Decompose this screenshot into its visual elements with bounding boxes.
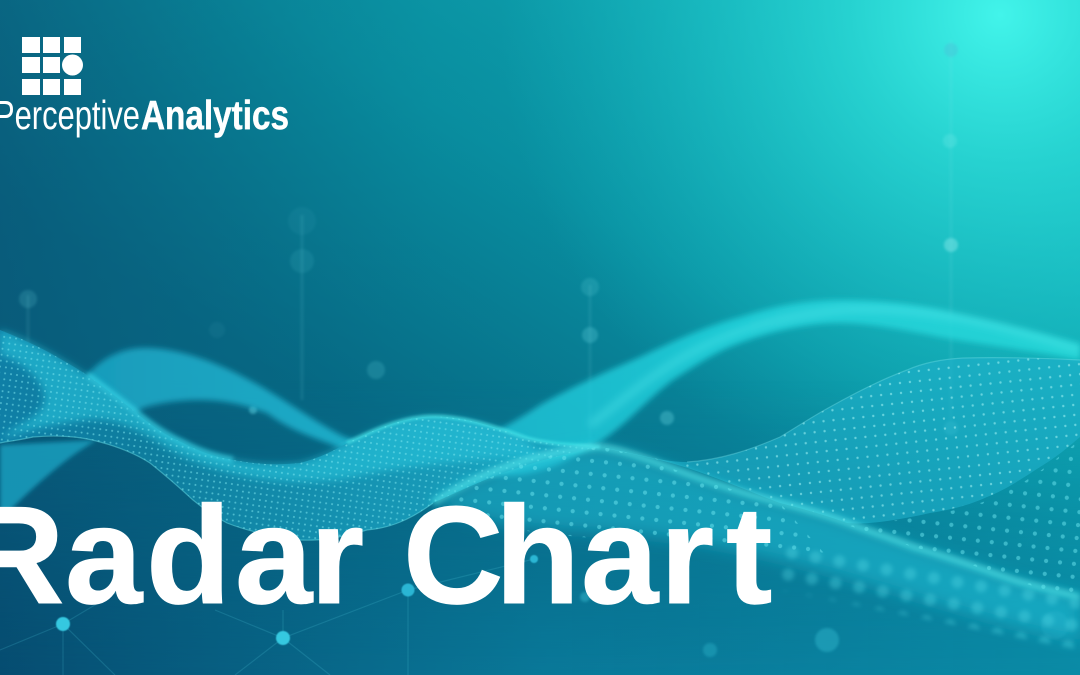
rear light ribbon	[0, 300, 1080, 520]
logo wordmark: Analytics	[141, 92, 289, 138]
left particle wave	[0, 330, 600, 540]
logo: Perceptive Analytics	[0, 37, 289, 138]
right fine particle wave	[600, 358, 1080, 523]
logo wordmark	[0, 92, 289, 138]
faint vertical light lines and network nodes	[19, 40, 958, 450]
icon: logo grid of squares and circle	[22, 37, 83, 95]
central coarse dot wave and front glow band	[433, 440, 1080, 650]
lower network nodes	[0, 555, 1069, 675]
